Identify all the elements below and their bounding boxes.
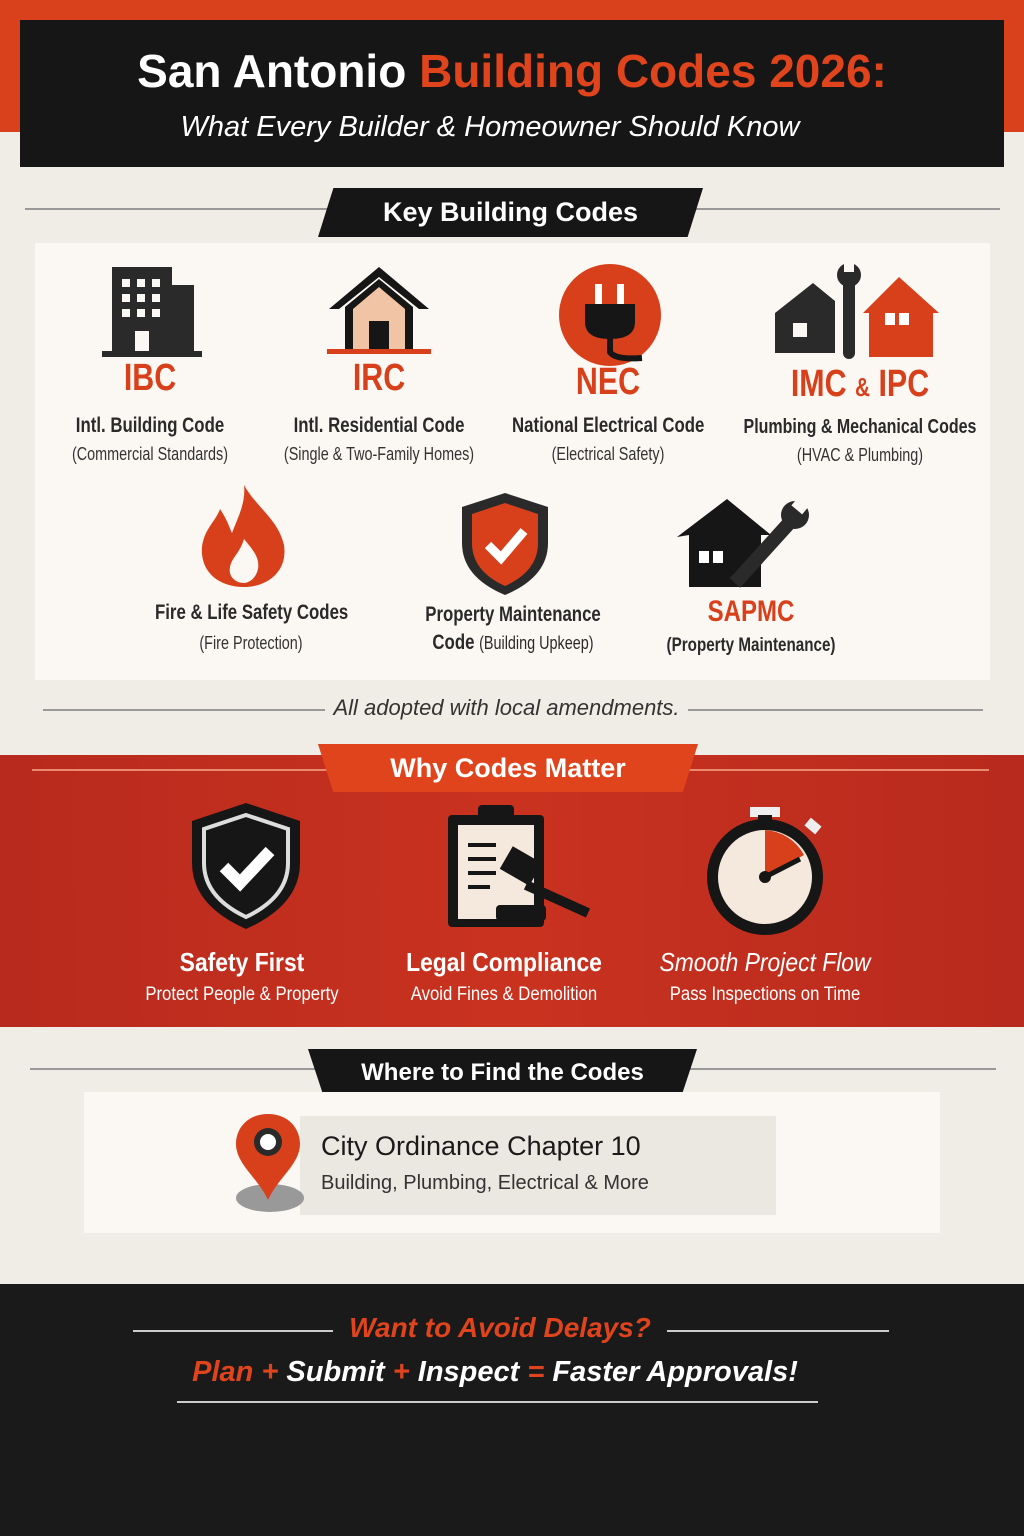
- text: safety first: Safety First: [180, 947, 304, 977]
- banner: where to find: [308, 1049, 697, 1096]
- label: IRC: [284, 357, 474, 464]
- info box: Building, Plumbing, Electrical & More: [321, 1172, 649, 1194]
- icon: building: [102, 267, 202, 357]
- label: IMC & IPC: Plumbing & Mechanical Codes: [744, 416, 976, 438]
- text: city ordinance: City Ordinance Chapter 10: [321, 1131, 641, 1161]
- text: legal compliance: [406, 947, 602, 1005]
- label: SAPMC: [667, 595, 835, 656]
- panel: key codes: [35, 243, 990, 680]
- icon: clipboard gavel: [448, 805, 590, 927]
- label: fire & life safety: [155, 601, 348, 653]
- label: fire & life safety: Fire & Life Safety Codes: [155, 601, 348, 624]
- label: NEC: NEC: [576, 361, 640, 403]
- label: NEC: (Electrical Safety): [552, 444, 664, 464]
- icon: house: [327, 267, 431, 354]
- label: IRC: Intl. Residential Code: [294, 414, 464, 437]
- text: safety first: [145, 947, 339, 1005]
- text: smooth project flow: [659, 947, 872, 1005]
- label: IBC: (Commercial Standards): [72, 444, 228, 464]
- footer: [0, 1284, 1024, 1536]
- label: IBC: IBC: [124, 357, 176, 399]
- title: San Antonio Building Codes 2026:: [137, 45, 887, 97]
- icon: shield: [192, 803, 300, 929]
- banner: where to find: Where to Find the Codes: [361, 1059, 644, 1086]
- label: property maintenance: Code (Building Upkeep): [432, 631, 594, 654]
- text: legal compliance: Avoid Fines & Demolition: [411, 984, 597, 1005]
- label: property maintenance: Property Maintenance: [425, 603, 601, 626]
- icon: shield check: [462, 493, 548, 595]
- note: local amendments: All adopted with local amendments.: [333, 695, 680, 720]
- icon: stopwatch: [707, 807, 823, 935]
- icon: map pin: [236, 1114, 304, 1212]
- text: smooth project flow: Smooth Project Flow: [659, 947, 871, 977]
- title box: [20, 20, 1004, 167]
- label: fire & life safety: (Fire Protection): [199, 633, 303, 653]
- footer formula: Plan + Submit + Inspect = Faster Approvals!: [192, 1356, 798, 1388]
- label: NEC: National Electrical Code: [512, 414, 704, 437]
- label: IBC: [72, 357, 228, 464]
- label: IRC: IRC: [353, 357, 405, 399]
- label: NEC: [512, 361, 704, 464]
- icon: plug: [559, 264, 661, 366]
- footer question: Want to Avoid Delays?: [349, 1312, 651, 1343]
- label: IMC & IPC: (HVAC & Plumbing): [797, 445, 923, 465]
- top orange stripe: [0, 0, 1024, 132]
- text: safety first: Protect People & Property: [145, 984, 339, 1005]
- banner: why codes matter: Why Codes Matter: [390, 753, 626, 783]
- icon: fire: [202, 485, 284, 587]
- label: property maintenance: [425, 603, 601, 654]
- panel: why codes matter: [0, 755, 1024, 1027]
- banner: Key Building Codes: Key Building Codes: [383, 197, 638, 227]
- label: IRC: (Single & Two-Family Homes): [284, 444, 474, 464]
- text: legal compliance: Legal Compliance: [406, 947, 602, 977]
- banner: Key Building Codes: [318, 188, 703, 237]
- label: SAPMC: (Property Maintenance): [667, 635, 835, 656]
- panel: where to find: [84, 1092, 940, 1233]
- text: smooth project flow: Pass Inspections on Time: [670, 984, 860, 1005]
- banner: why codes matter: [318, 744, 698, 792]
- icon: house wrench: [677, 499, 809, 588]
- label: SAPMC: SAPMC: [708, 595, 794, 628]
- label: IBC: Intl. Building Code: [76, 414, 224, 437]
- label: IMC & IPC: [744, 363, 976, 465]
- info box: [300, 1116, 776, 1215]
- subtitle: What Every Builder & Homeowner Should Know: [181, 111, 799, 143]
- icon: houses & wrench: [775, 264, 939, 359]
- label: IMC & IPC: IMC & IPC: [791, 363, 929, 405]
